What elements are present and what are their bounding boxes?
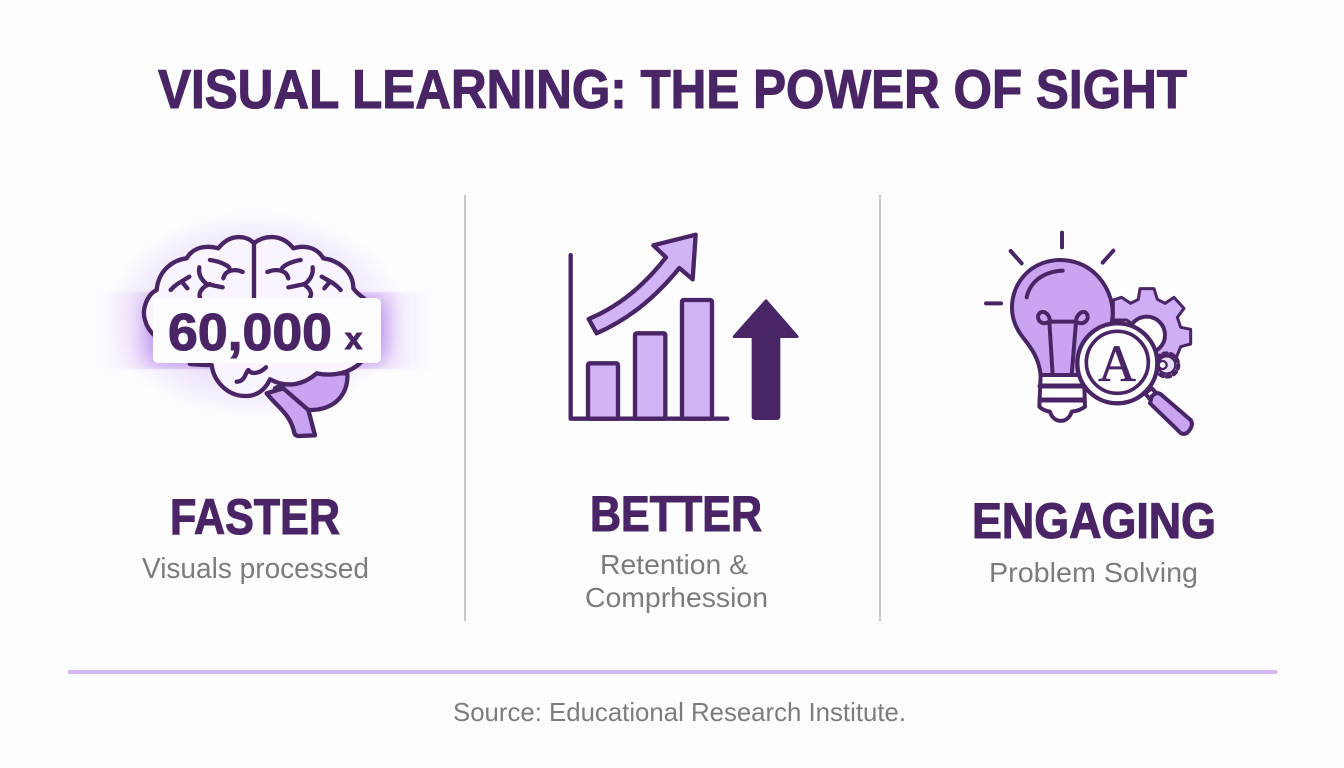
title: VISUAL LEARNING: THE POWER OF SIGHT [158,58,1187,120]
panel: better [571,235,797,613]
icon: brain with glow [110,222,414,438]
heading: better: BETTER [590,486,762,542]
text: problem solving: Problem Solving [989,557,1198,588]
stat label: 60,000 x: 60,000 [168,304,332,362]
icon letter: A: A [1098,336,1136,393]
text: retention and comprehension [585,549,768,613]
panel: engaging [972,233,1216,588]
heading: faster: FASTER [170,489,340,545]
text: retention and comprehension: Retention & [600,549,748,580]
stat label: 60,000 x [153,298,381,363]
text: retention and comprehension: Comprhession [585,582,768,613]
source note: Source: Educational Research Institute. [453,697,906,727]
icon: rising bar chart with arrows [571,235,797,419]
panel: faster [110,222,414,584]
gear [1113,289,1191,357]
icon: light bulb, gear and magnifier [986,233,1192,434]
stat label: 60,000 x: x [345,321,363,356]
text: visuals processed: Visuals processed [142,553,369,585]
heading: engaging: ENGAGING [972,493,1216,549]
